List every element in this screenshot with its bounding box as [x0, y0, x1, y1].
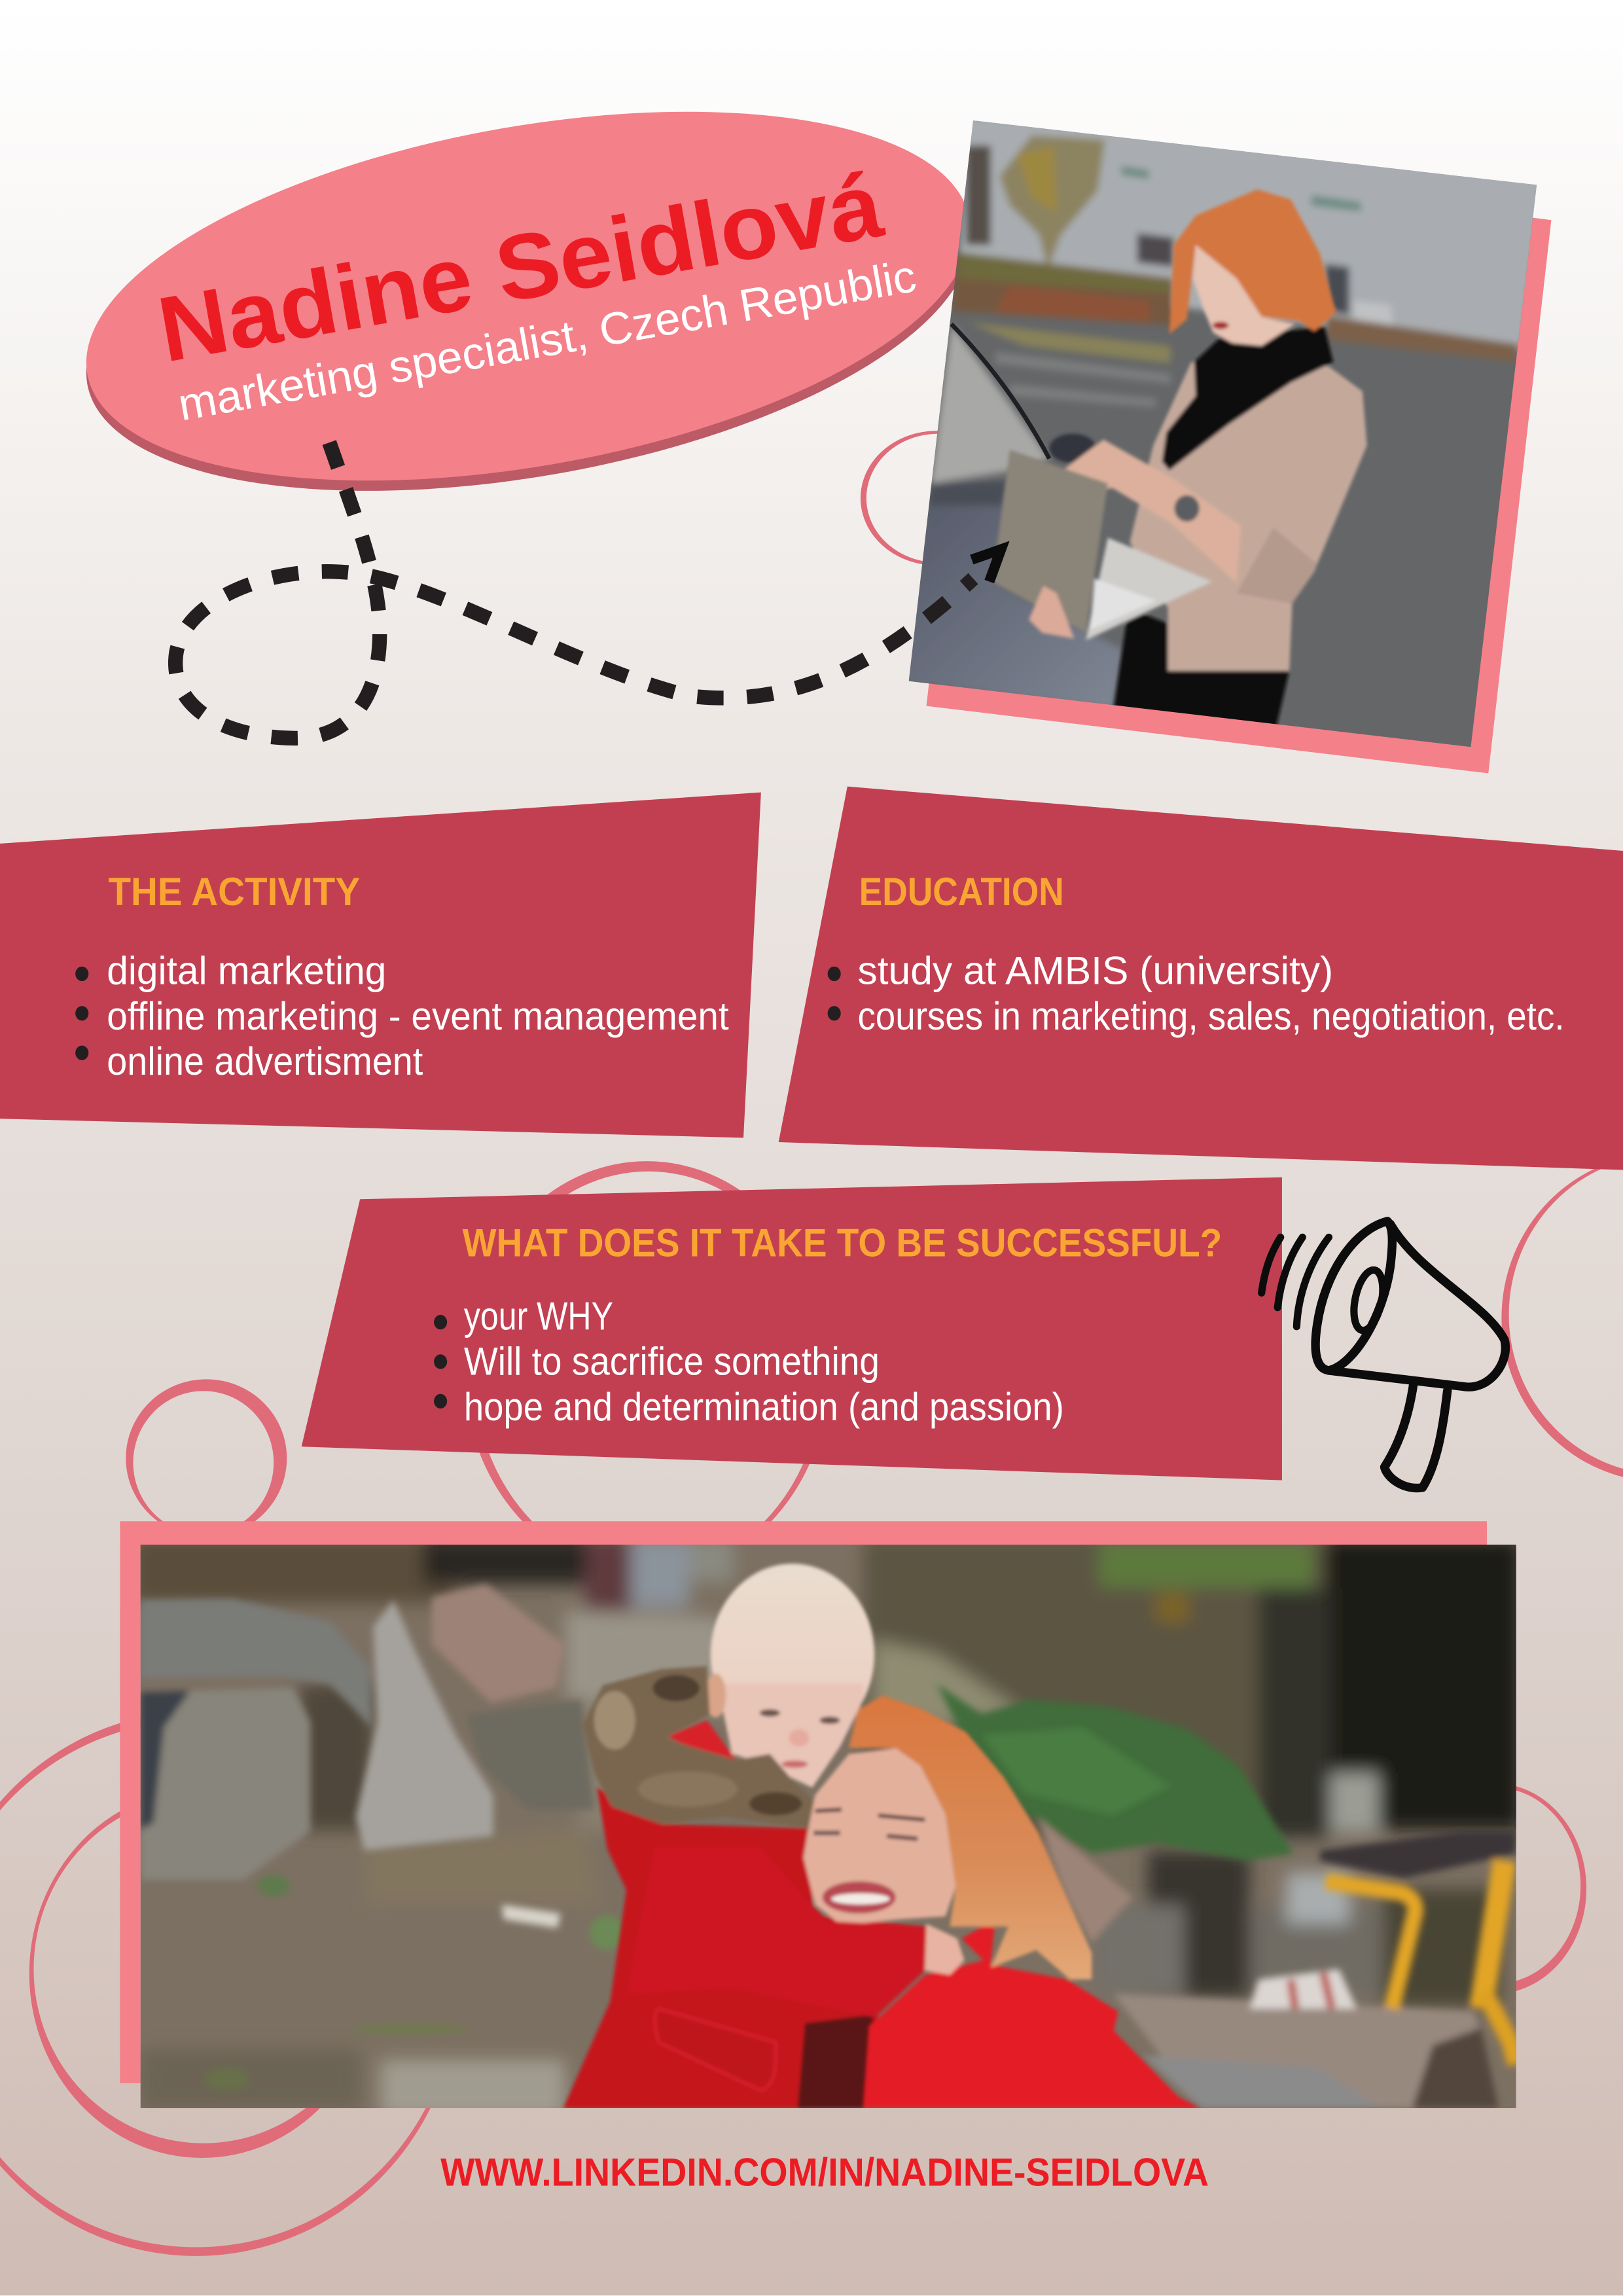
- woman's trousers: [1114, 608, 1289, 728]
- laptop lid: [992, 450, 1108, 633]
- portrait photo: [908, 120, 1537, 747]
- striped barrier: [1250, 1969, 1357, 2009]
- success list: hope and determination (and passion): [464, 1384, 1064, 1429]
- heading: the activity: THE ACTIVITY: [108, 869, 360, 914]
- mother's face: [804, 1748, 955, 1925]
- watch: [1175, 495, 1200, 522]
- success list: Will to sacrifice something: [464, 1339, 880, 1384]
- education list: [828, 948, 1565, 1038]
- child's collar: [668, 1720, 736, 1760]
- education list: study at AMBIS (university): [857, 948, 1333, 993]
- portrait photo frame: [927, 147, 1551, 774]
- panel: education: [779, 787, 1623, 1170]
- backdrop: hill: [863, 1537, 1332, 1837]
- linkedin url: WWW.LINKEDIN.COM/IN/NADINE-SEIDLOVA: [440, 2150, 1209, 2195]
- bench: [1320, 1831, 1516, 1878]
- job subtitle: marketing specialist, Czech Republic: [174, 250, 919, 430]
- backdrop: lower right: [1147, 1850, 1250, 1997]
- keyboard: [1086, 537, 1212, 640]
- hedge: [952, 252, 1173, 325]
- forearm and hand: [1057, 440, 1241, 583]
- child's hand: [925, 1924, 965, 1975]
- panel: the activity: [0, 793, 761, 1138]
- child's hood fur: [582, 1666, 815, 1829]
- activity list: digital marketing: [107, 948, 386, 993]
- car: [931, 324, 1049, 484]
- decorative rings: [0, 431, 1623, 2256]
- scarf: [1162, 327, 1333, 471]
- face: [1193, 245, 1295, 346]
- child's arm: [626, 1848, 928, 2017]
- dashed route arrow: [175, 442, 1001, 738]
- hair: [1169, 189, 1336, 334]
- success list: your WHY: [464, 1293, 613, 1338]
- mother's hair: [849, 1695, 1092, 1979]
- dark centre between coats: [798, 2015, 874, 2108]
- activity list: [75, 948, 729, 1083]
- mother's coat: [863, 1920, 1200, 2108]
- heading: what does it take: WHAT DOES IT TAKE TO BE SUCCESSFUL?: [463, 1220, 1222, 1265]
- education list: courses in marketing, sales, negotiation, etc.: [857, 994, 1565, 1038]
- road markings: [969, 323, 1171, 363]
- name bubble: [58, 51, 999, 551]
- icon: megaphone: [1262, 1221, 1505, 1488]
- family photo frame: [120, 1521, 1487, 2083]
- activity list: online advertisment: [107, 1039, 423, 1083]
- child's coat: [563, 1787, 928, 2108]
- name heading: Nadine Seidlová: [151, 152, 890, 382]
- woman's blazer: [1130, 362, 1367, 671]
- green bush: [936, 1683, 1294, 1861]
- family photo: [132, 1537, 1522, 2119]
- rocks: [141, 1599, 372, 1728]
- tree: [999, 135, 1105, 270]
- backdrop: upper left: [132, 1537, 454, 1603]
- ground patches: [258, 1875, 290, 1896]
- heading: education: EDUCATION: [859, 869, 1064, 914]
- success list: [434, 1293, 1064, 1429]
- building: [959, 115, 1544, 351]
- activity list: offline marketing - event management: [107, 994, 729, 1038]
- panel: what does it take: [302, 1177, 1282, 1480]
- child's head: [711, 1564, 874, 1745]
- foreground rocks: [1038, 1817, 1133, 1943]
- lower hand: [1029, 586, 1074, 639]
